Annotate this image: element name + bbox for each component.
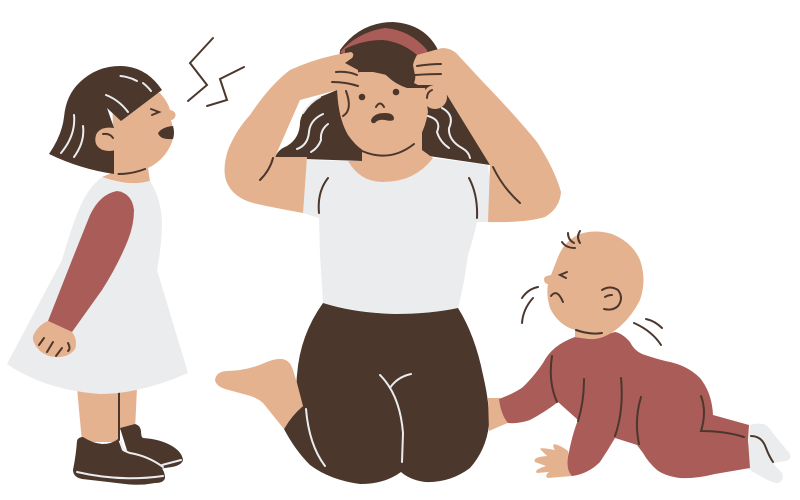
figure: crying baby bbox=[488, 231, 790, 483]
girl shoe laces bbox=[77, 442, 181, 478]
girl hand bbox=[33, 321, 76, 357]
mother ear line bbox=[427, 90, 432, 98]
mother nose bbox=[376, 104, 384, 107]
girl dress bbox=[7, 177, 188, 394]
mother right arm and hand bbox=[413, 48, 561, 222]
mother finger lines bbox=[332, 64, 441, 86]
mother chin line bbox=[362, 144, 414, 156]
mother arm lines bbox=[260, 158, 520, 203]
baby romper bbox=[499, 332, 750, 478]
mother shirt bbox=[303, 158, 491, 314]
mother left arm and hand bbox=[224, 52, 359, 213]
girl back shoe bbox=[120, 424, 183, 469]
baby neck line bbox=[576, 330, 602, 334]
figure: stressed mother bbox=[215, 22, 561, 484]
baby sock line bbox=[751, 436, 773, 462]
baby head bbox=[544, 232, 644, 339]
girl finger lines bbox=[39, 338, 70, 356]
figure: shouting girl bbox=[7, 66, 188, 485]
baby eye bbox=[560, 272, 567, 278]
girl back leg bbox=[118, 388, 137, 430]
mother knee foot bbox=[215, 359, 303, 429]
mother hair highlights bbox=[297, 97, 470, 158]
girl neck line bbox=[118, 169, 145, 174]
girl hair highlights bbox=[61, 76, 151, 157]
baby romper seams bbox=[551, 356, 744, 444]
baby ear bbox=[602, 288, 621, 310]
mother neck bbox=[348, 130, 433, 182]
girl ear bbox=[95, 128, 115, 151]
mother front hair bbox=[345, 40, 425, 88]
girl eye bbox=[151, 109, 159, 115]
mother trouser highlights bbox=[306, 374, 411, 466]
mother face bbox=[337, 72, 428, 155]
girl neck and face bbox=[102, 90, 176, 183]
baby hair bbox=[562, 231, 580, 248]
icon: shouting lightning bolts bbox=[188, 38, 244, 106]
girl front leg bbox=[77, 388, 118, 442]
girl ear line bbox=[103, 134, 113, 138]
baby crying mouth bbox=[551, 293, 563, 302]
baby shaking lines bbox=[522, 287, 662, 345]
mother worried mouth bbox=[371, 113, 394, 123]
mother ear bbox=[423, 85, 447, 109]
mother headband bbox=[340, 28, 433, 85]
mother eyes bbox=[359, 89, 399, 100]
girl open mouth bbox=[158, 126, 174, 139]
girl front shoe bbox=[73, 437, 165, 485]
girl hair bbox=[49, 66, 162, 174]
girl sleeve bbox=[48, 191, 134, 332]
baby socks bbox=[747, 424, 790, 483]
mother trousers bbox=[284, 303, 489, 484]
mother shirt lines bbox=[319, 178, 477, 218]
mother hair back bbox=[275, 22, 490, 165]
girl leg divider bbox=[118, 393, 120, 440]
baby far hand bbox=[488, 398, 510, 431]
baby near hand bbox=[534, 444, 572, 478]
mother cheek line bbox=[343, 91, 349, 116]
